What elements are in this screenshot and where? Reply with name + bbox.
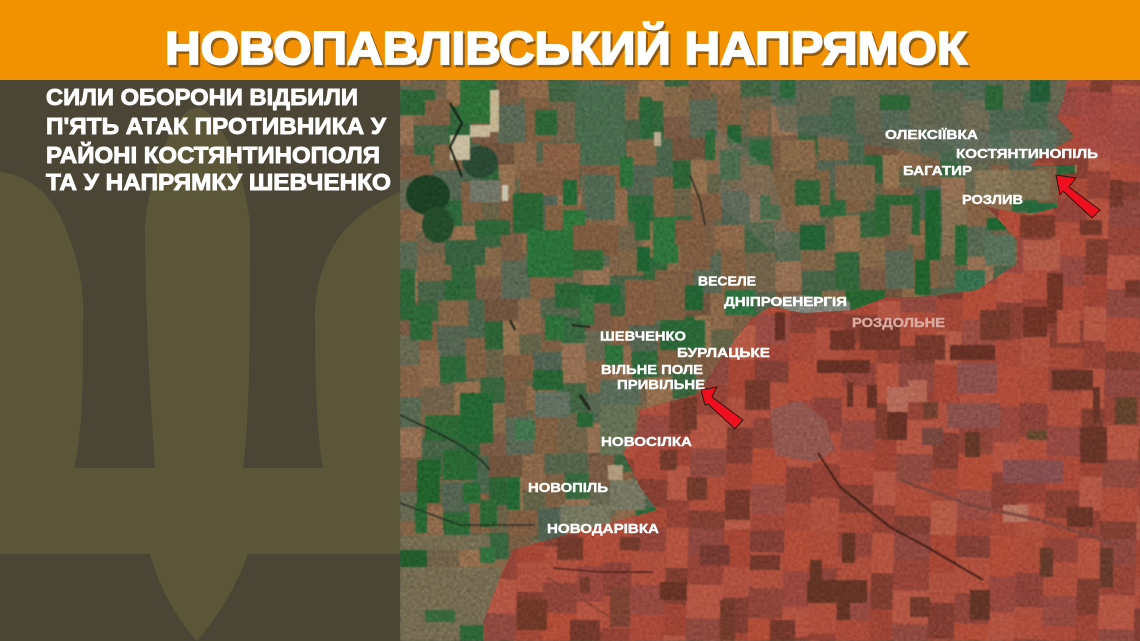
map labels: БАГАТИР: [903, 163, 972, 178]
text block: summary: РАЙОНІ КОСТЯНТИНОПОЛЯ: [46, 141, 380, 168]
natural fields north-west: [400, 90, 435, 115]
panel: satellite map: [400, 80, 1140, 641]
mid-west strip: [475, 220, 510, 235]
south-west red fields: [557, 537, 583, 560]
map labels: НОВОДАРІВКА: [547, 521, 660, 536]
icon: trident emblem: [0, 108, 400, 641]
map labels: ВЕСЕЛЕ: [698, 274, 756, 288]
map labels: БУРЛАЦЬКЕ: [677, 345, 770, 360]
south-east red fields: [817, 360, 870, 373]
rivers: [450, 103, 462, 177]
forests and lights: [406, 175, 450, 215]
map labels: КОСТЯНТИНОПІЛЬ: [956, 146, 1098, 161]
title: НОВОПАВЛІВСЬКИЙ НАПРЯМОК: [165, 22, 968, 74]
text block: summary: СИЛИ ОБОРОНИ ВІДБИЛИ: [46, 84, 358, 110]
left panel background: [0, 80, 400, 641]
north-east natural: [770, 80, 1070, 165]
map labels: НОВОПІЛЬ: [528, 480, 608, 495]
central red fields: [683, 397, 697, 430]
text block: summary: П'ЯТЬ АТАК ПРОТИВНИКА У: [46, 113, 387, 139]
map labels: ПРИВІЛЬНЕ: [617, 377, 705, 392]
map labels: РОЗДОЛЬНЕ: [852, 315, 945, 330]
map labels: ОЛЕКСІЇВКА: [885, 127, 979, 142]
map labels: [528, 127, 1098, 536]
text block: summary: [46, 84, 391, 195]
north-east red fields: [1110, 180, 1123, 207]
ravines: [818, 453, 983, 580]
map labels: РОЗЛИВ: [962, 192, 1023, 207]
title: НОВОПАВЛІВСЬКИЙ НАПРЯМОК: [167, 24, 970, 76]
arrow: Kostiantynopil attack: [1056, 175, 1100, 218]
map labels: ДНІПРОЕНЕРГІЯ: [724, 294, 847, 309]
header bar: [0, 0, 1140, 80]
map labels: ШЕВЧЕНКО: [600, 328, 686, 344]
south-west natural: [460, 393, 493, 443]
area: occupied territory (red overlay): [480, 80, 1140, 641]
map labels: ВІЛЬНЕ ПОЛЕ: [601, 362, 703, 377]
arrow: Pryvilne attack: [701, 387, 743, 429]
map labels: НОВОСІЛКА: [601, 434, 693, 449]
grey town strips: [715, 125, 792, 250]
text block: summary: ТА У НАПРЯМКУ ШЕВЧЕНКО: [46, 169, 391, 195]
town centres: [770, 400, 835, 462]
